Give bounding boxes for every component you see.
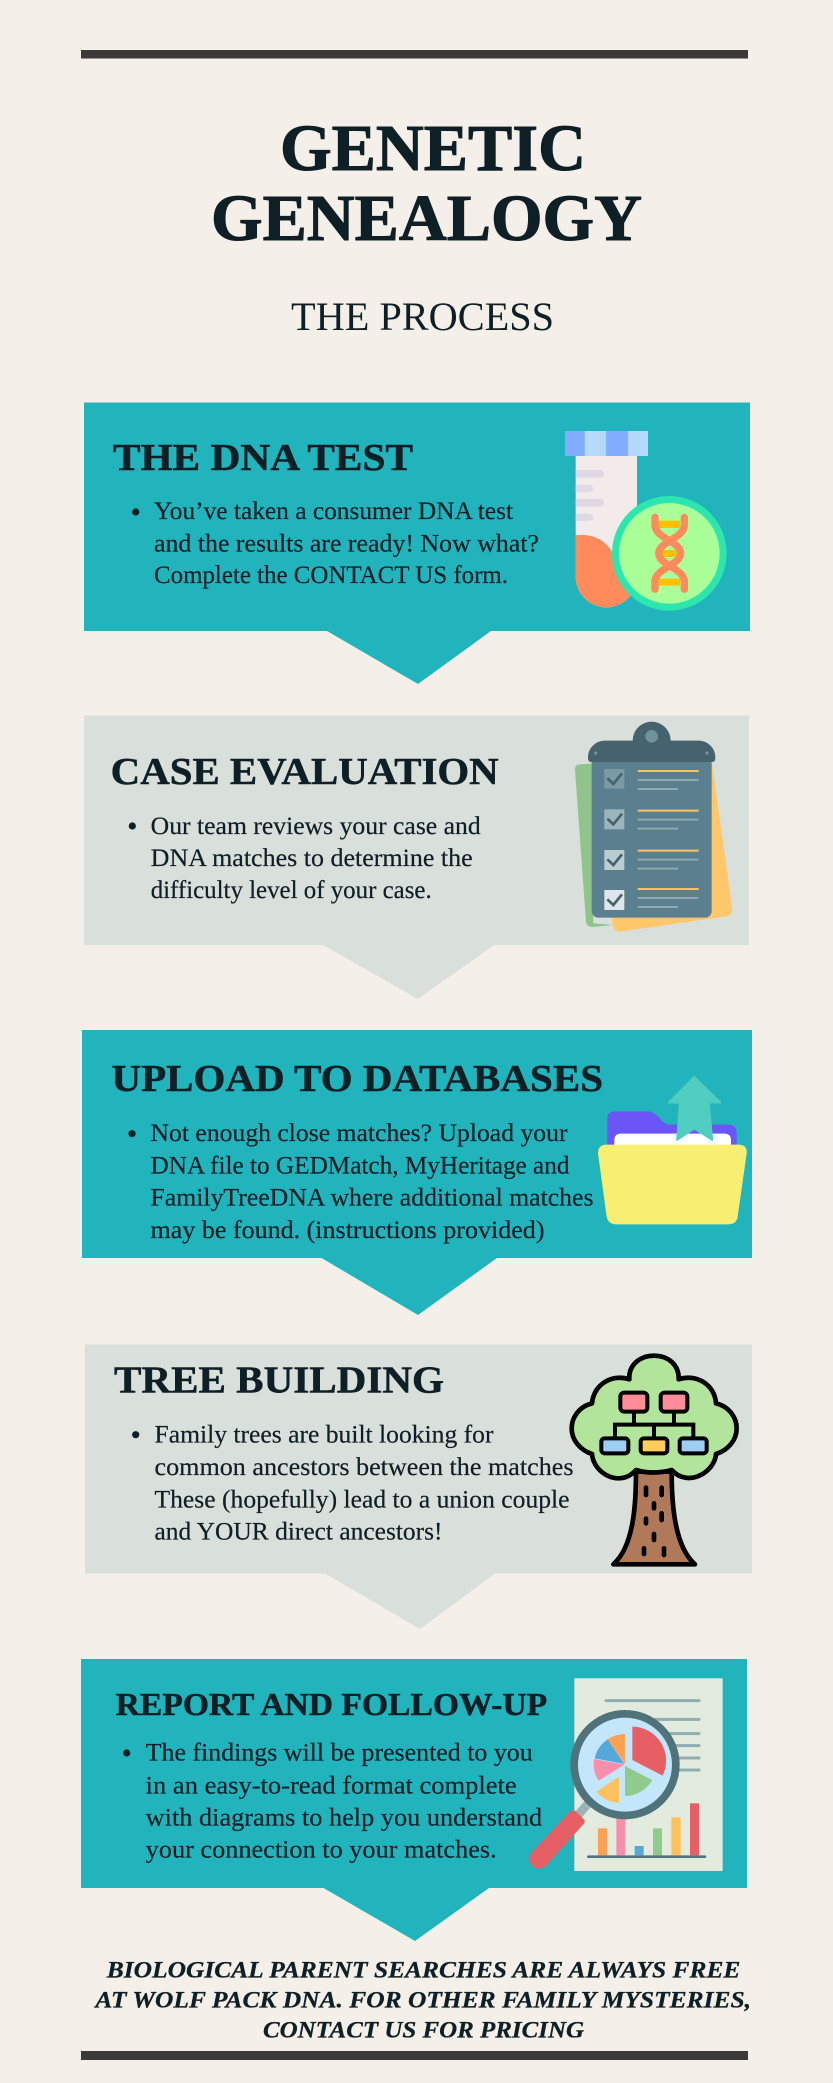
panel: tree building <box>85 1344 752 1629</box>
text block: upload description <box>128 1120 594 1244</box>
text block: case evaluation description: difficulty level of your case. <box>151 877 432 904</box>
panel background with arrow <box>81 1659 747 1941</box>
heading: tree building: TREE BUILDING <box>114 1360 444 1402</box>
text block: case evaluation description: DNA matches to determine the <box>151 845 473 872</box>
icon: DNA test tube <box>565 431 727 611</box>
icon: clipboard checklist <box>575 722 732 932</box>
text block: upload description: Not enough close matches? Upload your <box>150 1120 568 1147</box>
panel: report and follow-up <box>81 1659 747 1941</box>
panel background with arrow <box>84 716 749 999</box>
text block: upload description: DNA file to GEDMatch, MyHeritage and <box>150 1152 570 1179</box>
text block: case evaluation description: Our team reviews your case and <box>151 813 481 840</box>
heading: case evaluation: CASE EVALUATION <box>111 751 499 793</box>
bottom rule <box>81 2051 748 2060</box>
text block: report description: your connection to your matches. <box>146 1837 497 1864</box>
icon: family tree <box>572 1356 737 1564</box>
title <box>211 112 642 255</box>
heading: upload to databases: UPLOAD TO DATABASES <box>112 1058 603 1100</box>
text block: tree building description: These (hopefully) lead to a union couple <box>154 1486 570 1513</box>
top rule <box>81 50 748 58</box>
heading: report and follow-up: REPORT AND FOLLOW-UP <box>116 1686 547 1722</box>
panel background with arrow <box>82 1030 752 1315</box>
panel: case evaluation <box>84 716 749 999</box>
panel: upload to databases <box>82 1030 752 1315</box>
text block: report description: with diagrams to help you understand <box>146 1804 543 1831</box>
heading: the DNA test: THE DNA TEST <box>113 437 413 479</box>
icon: folder upload <box>598 1077 747 1224</box>
text block: DNA test description: You’ve taken a consumer DNA test <box>154 498 513 525</box>
panel background with arrow <box>85 1344 752 1629</box>
text block: DNA test description: and the results are ready! Now what? <box>154 530 539 558</box>
text block: tree building description <box>132 1421 574 1545</box>
text block: tree building description: and YOUR direct ancestors! <box>154 1518 442 1545</box>
footer note: BIOLOGICAL PARENT SEARCHES ARE ALWAYS FREE <box>106 1958 740 1983</box>
footer note: AT WOLF PACK DNA. FOR OTHER FAMILY MYSTERIES, <box>93 1988 751 2013</box>
footer note <box>93 1958 751 2043</box>
subtitle: THE PROCESS <box>291 294 554 339</box>
icon: report with magnifier <box>529 1678 723 1871</box>
text block: upload description: FamilyTreeDNA where additional matches <box>150 1185 594 1212</box>
text block: tree building description: common ancestors between the matches <box>154 1454 574 1481</box>
text block: report description: in an easy-to-read format complete <box>146 1772 517 1799</box>
text block: DNA test description: Complete the CONTACT US form. <box>154 562 508 589</box>
footer note: CONTACT US FOR PRICING <box>263 2018 584 2043</box>
text block: report description <box>123 1740 543 1864</box>
text block: case evaluation description <box>129 813 481 904</box>
title: GENETIC <box>280 112 586 185</box>
text block: upload description: may be found. (instructions provided) <box>150 1217 544 1244</box>
text block: report description: The findings will be presented to you <box>146 1740 533 1767</box>
title: GENEALOGY <box>211 182 642 255</box>
text block: DNA test description <box>132 498 539 589</box>
text block: tree building description: Family trees are built looking for <box>154 1421 494 1448</box>
panel: the DNA test <box>84 402 750 684</box>
panel background with arrow <box>84 402 750 684</box>
